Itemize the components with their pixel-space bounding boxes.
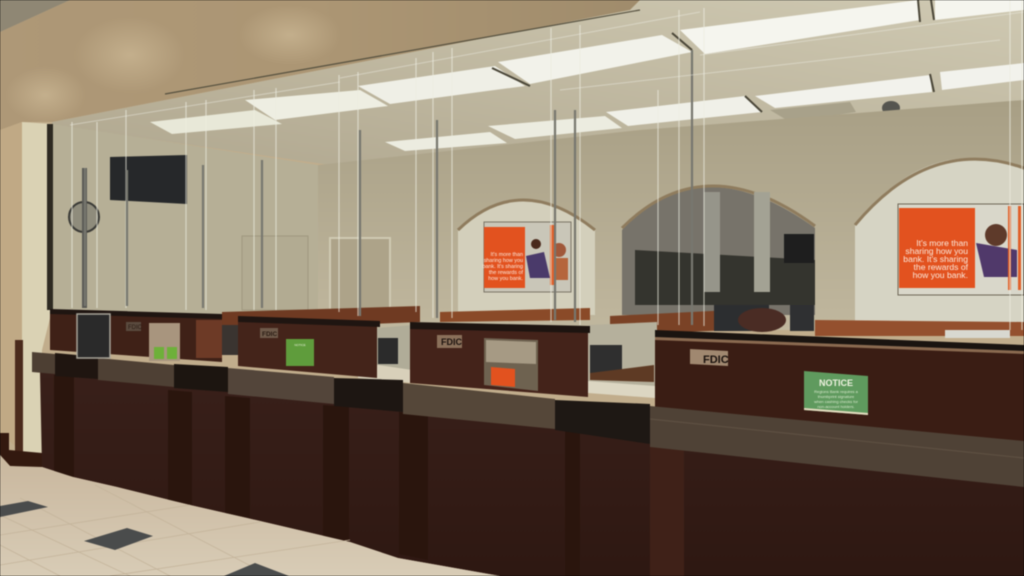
floor <box>0 455 500 576</box>
teller counter lower wood panels <box>40 372 1024 576</box>
cream window ledge right <box>575 380 655 398</box>
wall base post <box>15 340 23 452</box>
left pillar cream <box>22 122 52 453</box>
acrylic barriers and metal posts <box>70 0 1024 330</box>
cream window ledge middle <box>358 362 412 383</box>
beige wall section far left <box>0 122 22 452</box>
photo sign center <box>484 338 538 391</box>
FDIC tag 1 <box>126 322 143 331</box>
arch alcove 1 <box>458 200 595 315</box>
dark trim <box>47 124 53 310</box>
teller phone right <box>590 345 622 373</box>
green notice small: NOTICE <box>294 343 306 347</box>
floor dark tiles <box>0 501 289 576</box>
tv screen <box>110 155 187 204</box>
notice sign: NOTICE <box>819 378 853 388</box>
desk in right window <box>590 365 654 382</box>
notice sign: when cashing checks for <box>814 399 859 404</box>
poster left: It's more than <box>490 252 523 258</box>
wall clock <box>69 168 99 308</box>
back office furniture <box>222 305 1024 338</box>
left window opening <box>222 325 242 355</box>
photo sign 1 <box>149 323 180 361</box>
soffit light pools <box>5 5 340 123</box>
teller cabinets upper <box>50 309 1024 442</box>
middle window opening <box>377 325 413 372</box>
poster right: It's more than <box>916 238 968 248</box>
FDIC tag 2 <box>260 328 278 338</box>
poster left: how you bank. <box>488 276 523 282</box>
FDIC tag 3 <box>437 335 462 348</box>
right window opening <box>588 322 657 387</box>
poster right: sharing how you <box>905 246 968 256</box>
poster right: how you bank. <box>913 270 968 280</box>
poster left <box>482 222 571 292</box>
left side wall <box>52 124 318 330</box>
brushed metal counter ledges <box>32 352 1024 487</box>
ceiling light panels <box>150 0 1024 151</box>
FDIC tag 2: FDIC <box>262 331 277 338</box>
air vent <box>770 102 856 122</box>
door on left wall <box>242 236 308 310</box>
ceiling beam seams <box>492 0 934 112</box>
baseboard <box>0 433 42 469</box>
acrylic pass-through box <box>77 314 110 358</box>
notice sign: thumbprint signature <box>818 394 855 399</box>
FDIC tag 1: FDIC <box>128 325 143 331</box>
front pilaster <box>650 434 684 576</box>
ceiling top left <box>0 0 70 32</box>
notice sign <box>804 371 868 415</box>
notice sign: Regions Bank requires a <box>814 389 859 394</box>
poster left: sharing how you <box>484 258 523 264</box>
notice sign: non-account holders. <box>817 404 855 409</box>
floor grid lines <box>0 485 350 576</box>
panel pilasters <box>54 375 580 576</box>
poster right <box>898 204 1024 295</box>
back wall <box>318 100 1024 330</box>
ceiling plane <box>52 0 1024 165</box>
security camera <box>882 101 900 115</box>
poster right: the rewards of <box>914 262 969 272</box>
FDIC tag 4 <box>690 349 729 366</box>
soffit beige wall <box>0 0 640 130</box>
teller phone middle <box>378 338 398 364</box>
poster left: the rewards of <box>489 270 523 276</box>
poster left: bank. It's sharing <box>482 264 523 270</box>
arch alcove 3 <box>855 158 1024 322</box>
arch alcove 2 opening <box>622 187 815 315</box>
FDIC tag 4: FDIC <box>703 354 729 366</box>
FDIC tag 3: FDIC <box>441 337 462 347</box>
back door <box>330 238 390 310</box>
poster right: bank. It's sharing <box>903 254 968 264</box>
green notice small <box>286 339 314 366</box>
